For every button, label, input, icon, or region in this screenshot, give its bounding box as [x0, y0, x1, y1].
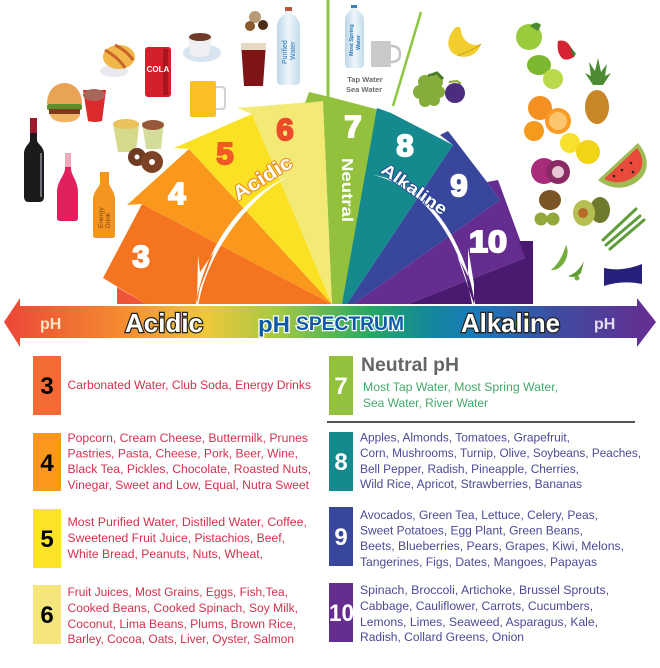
- icon: limes: [527, 55, 563, 89]
- icon: grey mug: [371, 41, 400, 67]
- divider under neutral row: [327, 421, 635, 423]
- icons: neutral waters: [345, 5, 400, 94]
- bar label: pH SPECTRUM: SPECTRUM: [296, 314, 404, 335]
- row: pH 10: Radish, Collard Greens, Onion: [360, 630, 524, 644]
- label: Acidic curved: Acidic: [229, 152, 297, 205]
- icon: pineapple: [585, 58, 611, 124]
- row: pH 3: Carbonated Water, Club Soda, Energy Drinks: [68, 378, 311, 392]
- spectrum arrow bar: [4, 298, 656, 347]
- row: pH 4: Pastries, Pasta, Cheese, Pork, Beer, Wine,: [68, 446, 298, 460]
- row: pH 9: Tangerines, Figs, Dates, Mangoes, Papayas: [360, 555, 597, 569]
- label: Alkaline curved: Alkaline: [378, 160, 451, 219]
- icon: kiwi: [534, 190, 561, 226]
- sector digit 10: 10: [469, 224, 507, 259]
- icon: spring water bottle: [345, 5, 364, 68]
- icon: watermelon slice: [598, 143, 647, 188]
- row: pH 8: Bell Pepper, Radish, Pineapple, Cherries,: [360, 462, 579, 476]
- row: pH 10: Cabbage, Cauliflower, Carrots, Cucumbers,: [360, 599, 593, 613]
- icon: purified water bottle: Water: [290, 41, 297, 60]
- icon: cola can: [145, 47, 171, 97]
- row: pH 4: 4: [40, 450, 54, 477]
- icon: soda cup: [83, 89, 106, 122]
- icon: avocados: [573, 197, 610, 226]
- sector: pH 8: [342, 108, 453, 304]
- icon: pink bottle: [57, 153, 78, 221]
- icon: purified water bottle: Purified: [282, 40, 289, 64]
- icon: energy drink bottle: Energy: [98, 207, 105, 228]
- row: pH 10: [329, 583, 609, 644]
- row: pH 6: [33, 585, 298, 646]
- row: pH 8: [329, 430, 641, 491]
- row: pH 6: 6: [40, 602, 54, 629]
- row: pH 8: Apples, Almonds, Tomatoes, Grapefruit,: [360, 430, 570, 444]
- icon: green apple: [516, 23, 542, 50]
- row: pH 3: 3: [40, 373, 54, 400]
- row: pH 5: 5: [40, 526, 54, 553]
- sector digit 5: 5: [216, 136, 234, 171]
- sector digit 8: 8: [396, 128, 414, 163]
- row: pH 4: Popcorn, Cream Cheese, Buttermilk, Prunes: [68, 431, 308, 445]
- row: pH 4: [33, 431, 311, 492]
- fan chart of pH sectors: [103, 92, 533, 304]
- icon: bananas: [448, 27, 481, 57]
- icon: spring water bottle: Most Spring: [349, 24, 355, 56]
- sector digit 3: 3: [132, 239, 150, 274]
- row: pH 6: Coconut, Lima Beans, Plums, Brown Rice,: [68, 617, 296, 631]
- icon: asparagus: [603, 209, 644, 249]
- icon: mixed nuts: [245, 11, 268, 31]
- bar with arrowheads: [4, 298, 656, 347]
- icon: cola can: COLA: [147, 65, 170, 74]
- panel: acidic food list: [33, 356, 311, 646]
- sector: pH 5: [174, 114, 332, 304]
- icon: coffee cup and saucer: [183, 33, 221, 62]
- arrow: acidic curve: [196, 177, 287, 304]
- text: tap water sea water: Tap Water: [347, 75, 383, 84]
- sector digit 6: 6: [276, 112, 294, 147]
- icon: purple cabbages: [531, 158, 570, 184]
- row: pH 5: Sweetened Fruit Juice, Pistachios, Beef,: [68, 531, 285, 545]
- sector: pH 7: [305, 92, 391, 304]
- row: pH 7 neutral: Most Tap Water, Most Spring Water,: [363, 380, 558, 394]
- row: pH 9: Sweet Potatoes, Egg Plant, Green Beans,: [360, 524, 583, 538]
- icons: acidic foods and drinks: [24, 7, 300, 238]
- icon: beer glass: [241, 43, 266, 86]
- sector digit 9: 9: [450, 168, 468, 203]
- label: Neutral vertical: Neutral: [338, 158, 355, 222]
- row: pH 3: [33, 356, 311, 415]
- icon: energy drink bottle: [93, 172, 115, 238]
- icon: wine bottle: [24, 118, 44, 202]
- row: pH 10: Lemons, Limes, Seaweed, Asparagus, Kale,: [360, 615, 598, 629]
- icon: strawberry: [558, 41, 576, 60]
- row: pH 9: Avocados, Green Tea, Lettuce, Celery, Peas,: [360, 508, 598, 522]
- sector: pH 6: [237, 101, 332, 304]
- row: pH 5: White Bread, Peanuts, Nuts, Wheat,: [68, 547, 263, 561]
- text: tap water sea water: [346, 75, 383, 94]
- bar label: pH right: pH: [594, 316, 615, 333]
- row: pH 9: 9: [334, 524, 348, 551]
- row: pH 9: Beets, Blueberries, Pears, Grapes, Kiwi, Melons,: [360, 539, 624, 553]
- divider lines: neutral green: [328, 0, 421, 106]
- icon: cake on plate: [100, 45, 135, 77]
- sector: pH 10: [354, 180, 525, 304]
- icons: alkaline fruit and vegetables: [413, 23, 647, 286]
- row: pH 5: Most Purified Water, Distilled Water, Coffee,: [68, 515, 307, 529]
- row: pH 7 neutral: 7: [334, 373, 348, 400]
- icon: blackberry: [445, 81, 465, 103]
- sector: pH 3: [103, 204, 332, 304]
- icon: lemons: [560, 133, 600, 164]
- text: tap water sea water: Sea Water: [346, 85, 382, 94]
- row: pH 5: [33, 509, 307, 568]
- icon: spring water bottle: Water: [356, 34, 362, 50]
- row: pH 7 neutral: Sea Water, River Water: [363, 396, 488, 410]
- bar label: Acidic: Acidic: [125, 308, 203, 338]
- row: pH 10: 10: [329, 600, 354, 627]
- icon: energy drink bottle: Drink: [105, 212, 112, 228]
- row: pH 6: Fruit Juices, Most Grains, Eggs, Fish,Tea,: [68, 585, 288, 599]
- bar label: pH SPECTRUM: pH: [258, 312, 290, 337]
- bar label: pH left: pH: [40, 316, 61, 333]
- sector digit 7: 7: [344, 109, 362, 144]
- icon: oranges: [524, 96, 571, 141]
- row: pH 8: Corn, Mushrooms, Turnip, Olive, Soybeans, Peaches,: [360, 446, 641, 460]
- row: pH 10: Spinach, Broccoli, Artichoke, Brussel Sprouts,: [360, 583, 609, 597]
- icon: coffee cups and donuts: [113, 119, 164, 173]
- arrow: alkaline curve: [373, 175, 475, 304]
- row: pH 6: Barley, Cocoa, Oats, Liver, Oyster, Salmon: [68, 632, 294, 646]
- row: pH 8: Wild Rice, Apricot, Strawberries, Bananas: [360, 477, 582, 491]
- row: pH 4: Black Tea, Pickles, Chocolate, Roasted Nuts,: [68, 462, 311, 476]
- icon: purified water bottle: [277, 7, 300, 85]
- sector digit 4: 4: [168, 176, 186, 211]
- row: pH 8: 8: [334, 449, 348, 476]
- icon: seaweed swatch: [604, 264, 642, 286]
- row: pH 7 neutral: [329, 355, 558, 415]
- panel: neutral and alkaline food list: [327, 355, 641, 644]
- bar label: pH SPECTRUM: [258, 312, 404, 337]
- icon: burger: [47, 83, 82, 122]
- row: pH 6: Cooked Beans, Cooked Spinach, Soy Milk,: [68, 601, 298, 615]
- row: pH 7 neutral: Neutral pH: [361, 355, 459, 376]
- bar label: Alkaline: Alkaline: [461, 308, 560, 338]
- sector: dark purple base: [408, 241, 533, 304]
- sector: pH 4: [127, 149, 332, 304]
- row: pH 9: [329, 507, 624, 569]
- icon: pea pods: [551, 245, 584, 280]
- sector: pH 9: [347, 131, 500, 304]
- icon: green grapes: [413, 73, 445, 107]
- icon: beer mug: [190, 81, 225, 117]
- row: pH 4: Vinegar, Sweet and Low, Equal, Nutra Sweet: [68, 478, 310, 492]
